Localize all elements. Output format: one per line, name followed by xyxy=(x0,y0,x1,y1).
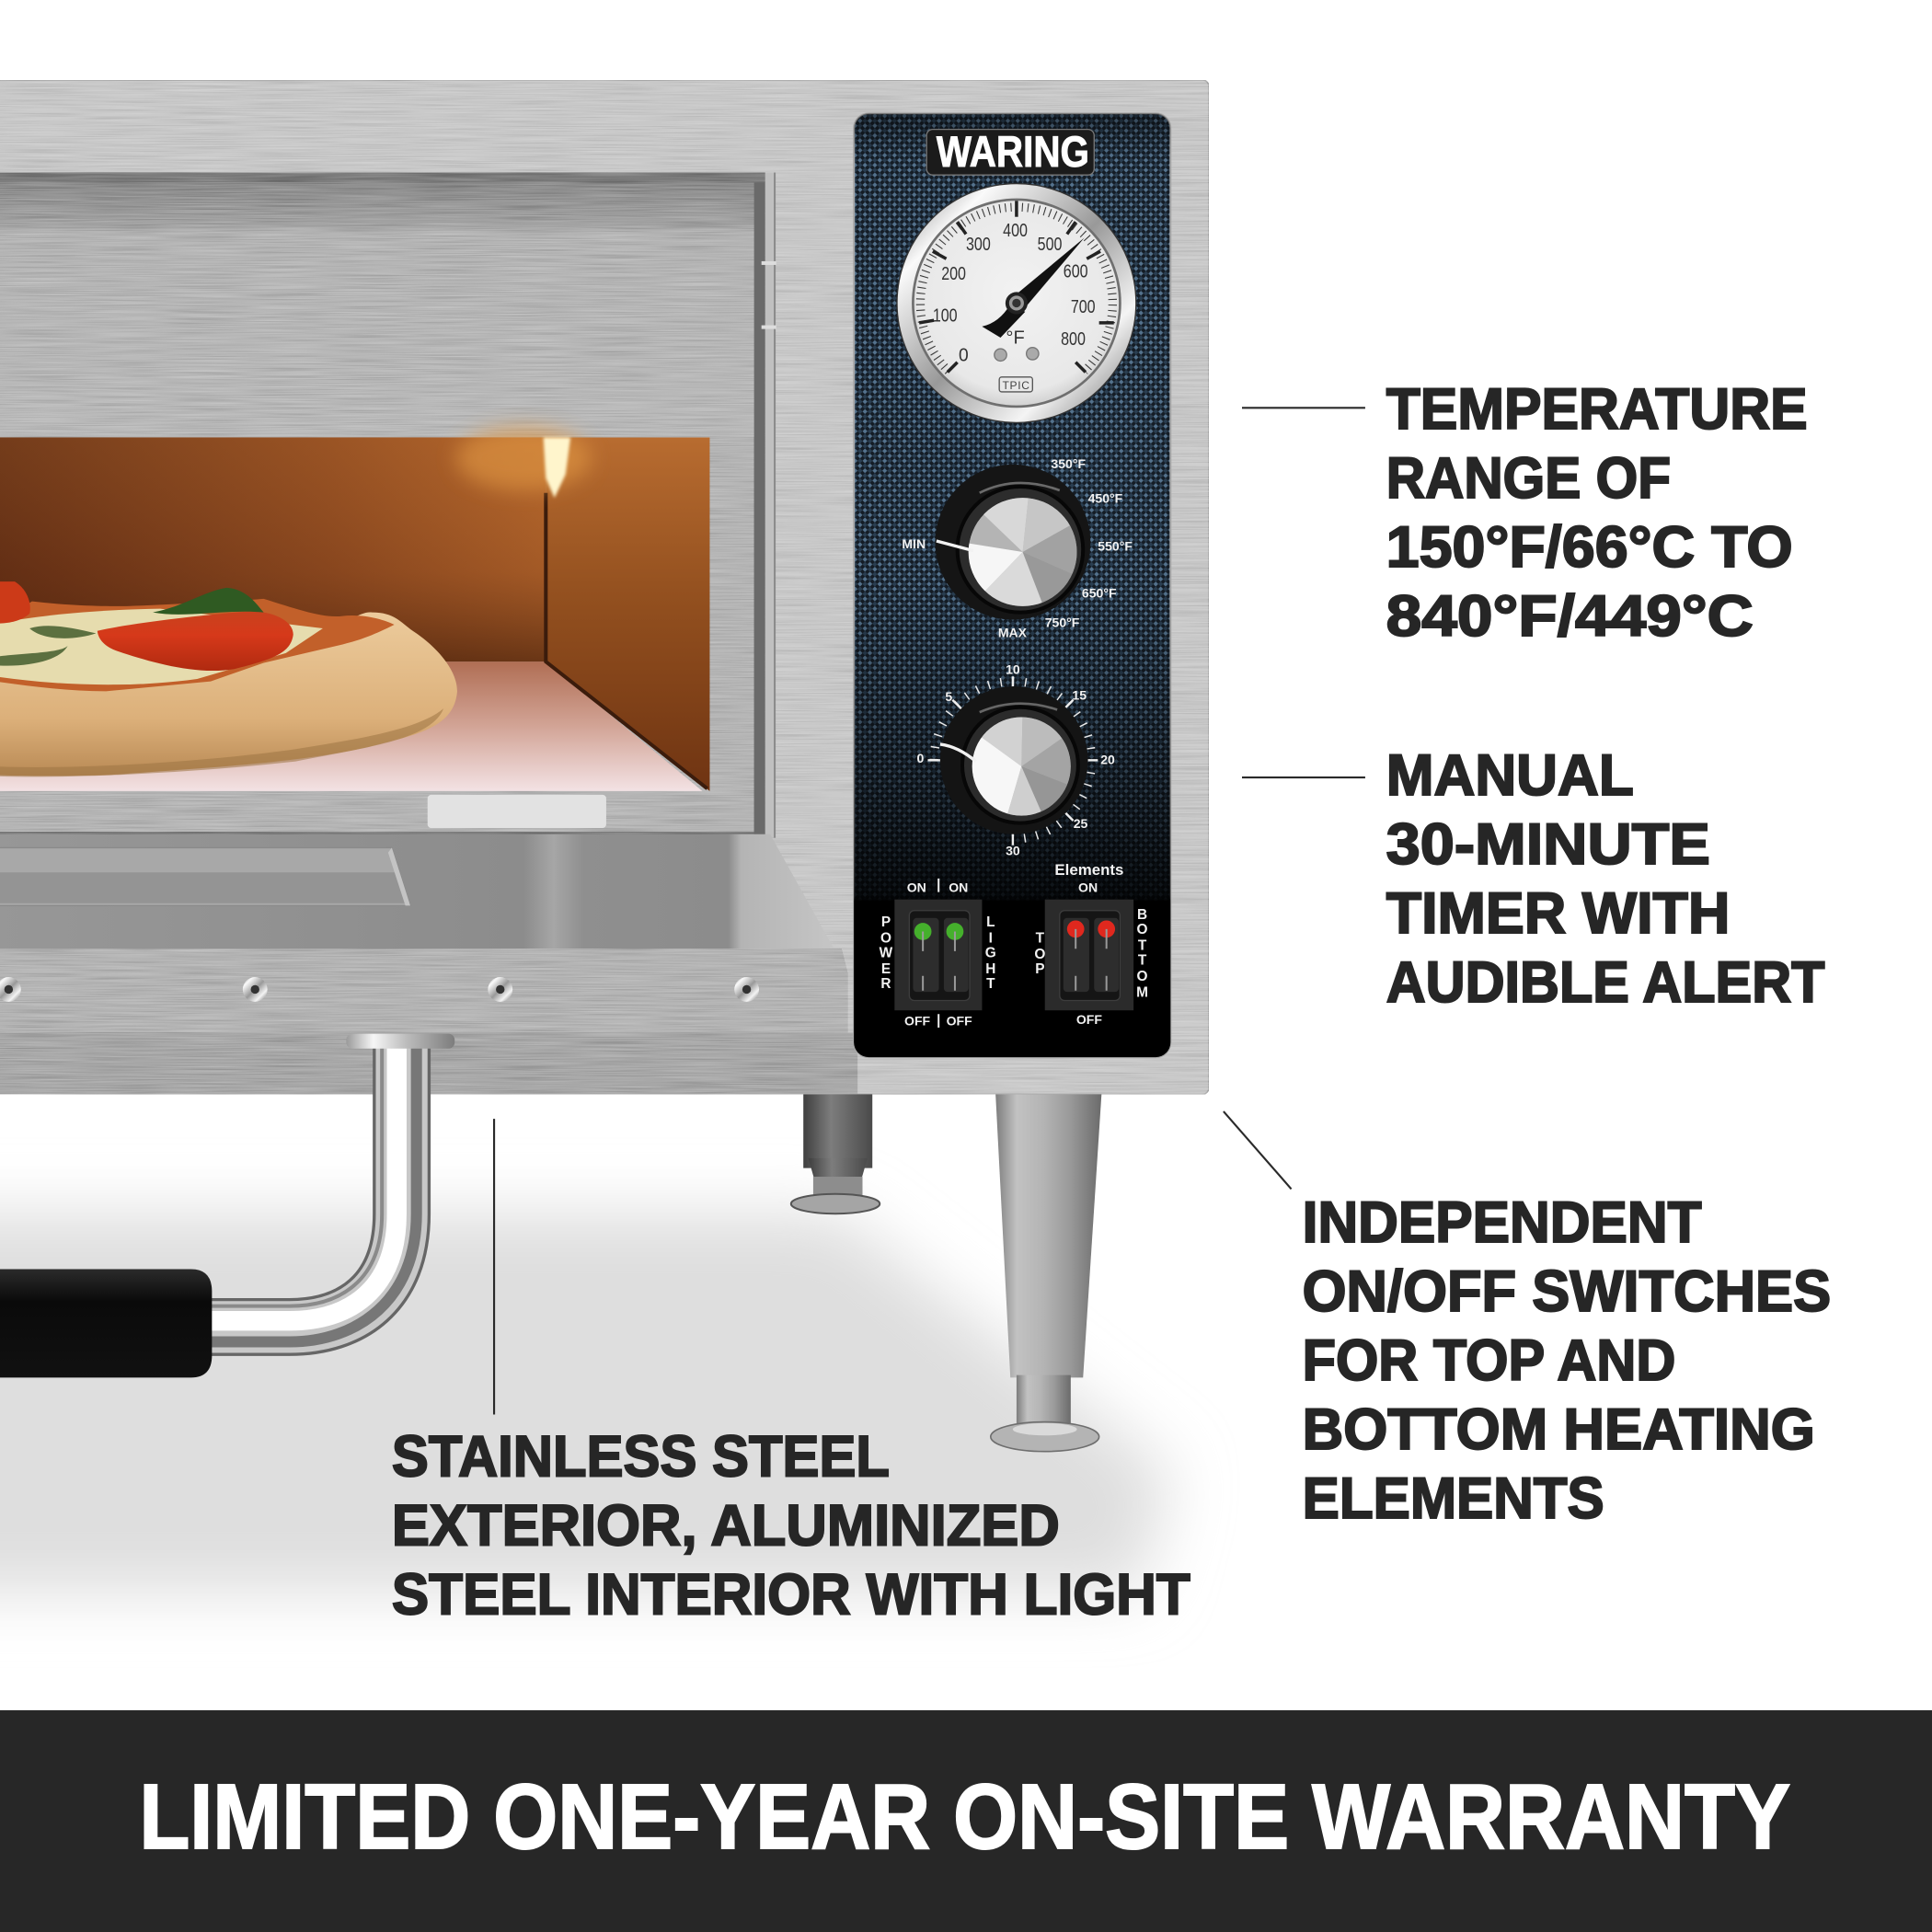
gauge scale numbers: 300 xyxy=(966,235,991,255)
callout: timer: MANUAL xyxy=(1386,743,1634,808)
tomato slice xyxy=(98,611,293,671)
element switches: ON xyxy=(1078,880,1098,895)
door handle xyxy=(0,1034,454,1377)
callout: temperature range: RANGE OF xyxy=(1386,446,1671,511)
callout: temperature range: 840°F/449°C xyxy=(1386,584,1754,649)
timer pointer xyxy=(940,744,976,762)
callout: switches xyxy=(1303,1190,1831,1531)
callout: temperature range: 150°F/66°C TO xyxy=(1386,515,1793,580)
gauge screws xyxy=(995,348,1039,361)
lower body strip xyxy=(0,1032,857,1094)
knob pointer xyxy=(937,541,973,551)
sauce rim xyxy=(0,599,395,691)
timer labels: 30 xyxy=(1006,843,1020,857)
product: pizza oven xyxy=(0,80,1209,1452)
timer labels: 5 xyxy=(945,689,952,704)
floor shadow xyxy=(0,1213,1170,1592)
rockers xyxy=(913,918,939,992)
corner seam xyxy=(546,493,707,788)
oven interior xyxy=(0,426,709,791)
gauge face xyxy=(914,201,1119,406)
top band and side body xyxy=(0,80,1209,1094)
front tab xyxy=(428,795,606,828)
light label: G xyxy=(985,946,996,961)
switch housing xyxy=(1045,900,1133,1010)
bottom label: B xyxy=(1137,907,1147,923)
gauge brand: TPIC xyxy=(1003,379,1029,392)
callout: stainless steel xyxy=(392,1424,1190,1627)
callout: stainless steel: STAINLESS STEEL xyxy=(392,1424,890,1489)
door top surface xyxy=(0,834,847,973)
knob temperature labels: 750°F xyxy=(1045,615,1080,630)
callout: stainless steel: EXTERIOR, ALUMINIZED xyxy=(392,1493,1060,1558)
red indicator lights xyxy=(1067,920,1085,937)
cavity recess xyxy=(0,173,774,838)
gauge scale numbers: 600 xyxy=(1064,261,1088,282)
handle flange xyxy=(346,1034,454,1049)
knob temperature labels: 650°F xyxy=(1082,586,1117,601)
knob temperature labels: MAX xyxy=(998,625,1028,639)
timer labels: 25 xyxy=(1074,816,1088,831)
top label: P xyxy=(1035,961,1044,977)
gauge scale numbers: °F xyxy=(1006,328,1025,349)
gauge scale numbers: 100 xyxy=(933,306,958,327)
green indicator lights xyxy=(914,923,931,940)
minor ticks xyxy=(920,207,1112,371)
gauge scale numbers xyxy=(933,221,1096,365)
timer labels: 0 xyxy=(917,751,925,765)
light label: L xyxy=(986,914,995,930)
light label: I xyxy=(989,931,993,947)
knob temperature labels: 550°F xyxy=(1098,539,1133,554)
leader line: stainless exterior xyxy=(493,1119,495,1415)
knob body xyxy=(936,465,1090,620)
bottom label: T xyxy=(1138,938,1147,954)
oven legs xyxy=(791,1094,1101,1452)
basil leaf xyxy=(153,588,264,615)
power label: O xyxy=(880,931,891,947)
gauge needle xyxy=(982,237,1085,338)
power and light switches: OFF xyxy=(904,1013,931,1028)
pizza xyxy=(0,581,457,776)
cavity side strip xyxy=(754,173,776,838)
tomato slice left xyxy=(0,581,30,624)
light flame xyxy=(544,437,570,498)
light glow xyxy=(456,426,592,490)
timer labels xyxy=(917,662,1115,857)
timer labels: 15 xyxy=(1072,688,1087,703)
power label: W xyxy=(880,946,893,961)
power and light switches xyxy=(880,879,996,1028)
panel plate xyxy=(854,113,1170,1057)
major ticks xyxy=(919,201,1114,372)
callout: timer: TIMER WITH xyxy=(1386,881,1730,946)
knob temperature labels: MIN xyxy=(902,536,926,551)
callout: switches: ELEMENTS xyxy=(1303,1466,1604,1531)
gauge scale numbers: 800 xyxy=(1061,329,1086,350)
bottom label: M xyxy=(1136,984,1148,1000)
element switches xyxy=(1034,861,1148,1027)
gauge scale numbers: 400 xyxy=(1003,221,1028,241)
elements labels: Elements xyxy=(1054,861,1123,879)
timer silver cap xyxy=(972,718,1071,816)
inner cavity top xyxy=(0,182,764,437)
top label: O xyxy=(1034,947,1045,962)
crust shadow band xyxy=(0,708,443,776)
oven body xyxy=(0,80,1209,1094)
leader line: timer xyxy=(1242,776,1365,778)
on off labels: ON xyxy=(907,880,926,895)
element switches: OFF xyxy=(1076,1012,1102,1027)
gauge scale numbers: 700 xyxy=(1071,297,1096,317)
knob temperature labels: 350°F xyxy=(1051,456,1086,471)
rocker marks xyxy=(1075,929,1107,991)
back leg xyxy=(791,1094,880,1213)
leader line: switches xyxy=(1224,1111,1292,1189)
callout: timer: 30-MINUTE xyxy=(1386,812,1710,877)
knob temperature labels: 450°F xyxy=(1088,490,1123,505)
front leg xyxy=(991,1094,1101,1452)
callout: timer: AUDIBLE ALERT xyxy=(1386,950,1824,1015)
chrome tube xyxy=(203,1047,417,1341)
gauge bezel xyxy=(897,184,1136,422)
crust xyxy=(0,612,457,776)
open door xyxy=(0,834,847,1032)
callout: timer xyxy=(1386,743,1824,1015)
cheese xyxy=(0,609,323,684)
light label: T xyxy=(986,976,995,992)
side wall xyxy=(546,437,709,791)
bottom label: O xyxy=(1137,969,1148,984)
control panel xyxy=(854,113,1170,1057)
callout: switches: FOR TOP AND xyxy=(1303,1328,1675,1393)
switch housing xyxy=(894,900,982,1010)
top label: T xyxy=(1036,931,1045,947)
timer ticks xyxy=(934,682,1092,839)
timer labels: 20 xyxy=(1100,752,1115,766)
power and light switches: OFF xyxy=(947,1013,972,1028)
knob temperature labels xyxy=(902,456,1133,639)
gauge brand xyxy=(999,377,1032,392)
temperature knob xyxy=(902,456,1133,639)
callout: switches: BOTTOM HEATING xyxy=(1303,1397,1815,1462)
power label: P xyxy=(881,914,891,930)
rockers xyxy=(1064,918,1089,992)
callout: temperature range xyxy=(1386,377,1808,649)
callout: switches: INDEPENDENT xyxy=(1303,1190,1702,1255)
temperature gauge xyxy=(897,184,1136,422)
gauge scale numbers: 0 xyxy=(959,345,969,365)
panel dark fade xyxy=(854,113,1170,1057)
gauge scale numbers: 500 xyxy=(1038,235,1062,255)
timer labels: 10 xyxy=(1006,662,1020,677)
opening frame xyxy=(0,437,754,832)
back wall xyxy=(0,437,546,661)
herb xyxy=(0,626,96,666)
power and light switches: ON xyxy=(949,880,968,895)
light label: H xyxy=(985,961,995,977)
power label: R xyxy=(880,976,891,992)
bottom label: O xyxy=(1137,922,1148,937)
power label: E xyxy=(881,961,891,977)
oven floor xyxy=(0,661,702,791)
rocker marks xyxy=(923,931,955,991)
callout: stainless steel: STEEL INTERIOR WITH LIGHT xyxy=(392,1562,1190,1627)
door front xyxy=(0,949,847,1032)
timer knob xyxy=(917,662,1115,857)
leader line: temperature xyxy=(1242,407,1365,408)
black grip xyxy=(0,1269,212,1377)
callout: switches: ON/OFF SWITCHES xyxy=(1303,1259,1831,1324)
callout: temperature range: TEMPERATURE xyxy=(1386,377,1808,442)
knob silver cap xyxy=(968,498,1076,606)
warranty banner xyxy=(0,1710,1932,1932)
timer knob body xyxy=(940,686,1088,834)
waring logo: WARING xyxy=(937,128,1089,176)
timer major ticks xyxy=(927,676,1098,845)
door recess xyxy=(0,847,410,905)
gauge scale numbers: 200 xyxy=(941,264,966,284)
warranty banner: LIMITED ONE-YEAR ON-SITE WARRANTY xyxy=(139,1765,1790,1869)
rivets xyxy=(0,977,759,1002)
bottom label: T xyxy=(1138,953,1147,969)
